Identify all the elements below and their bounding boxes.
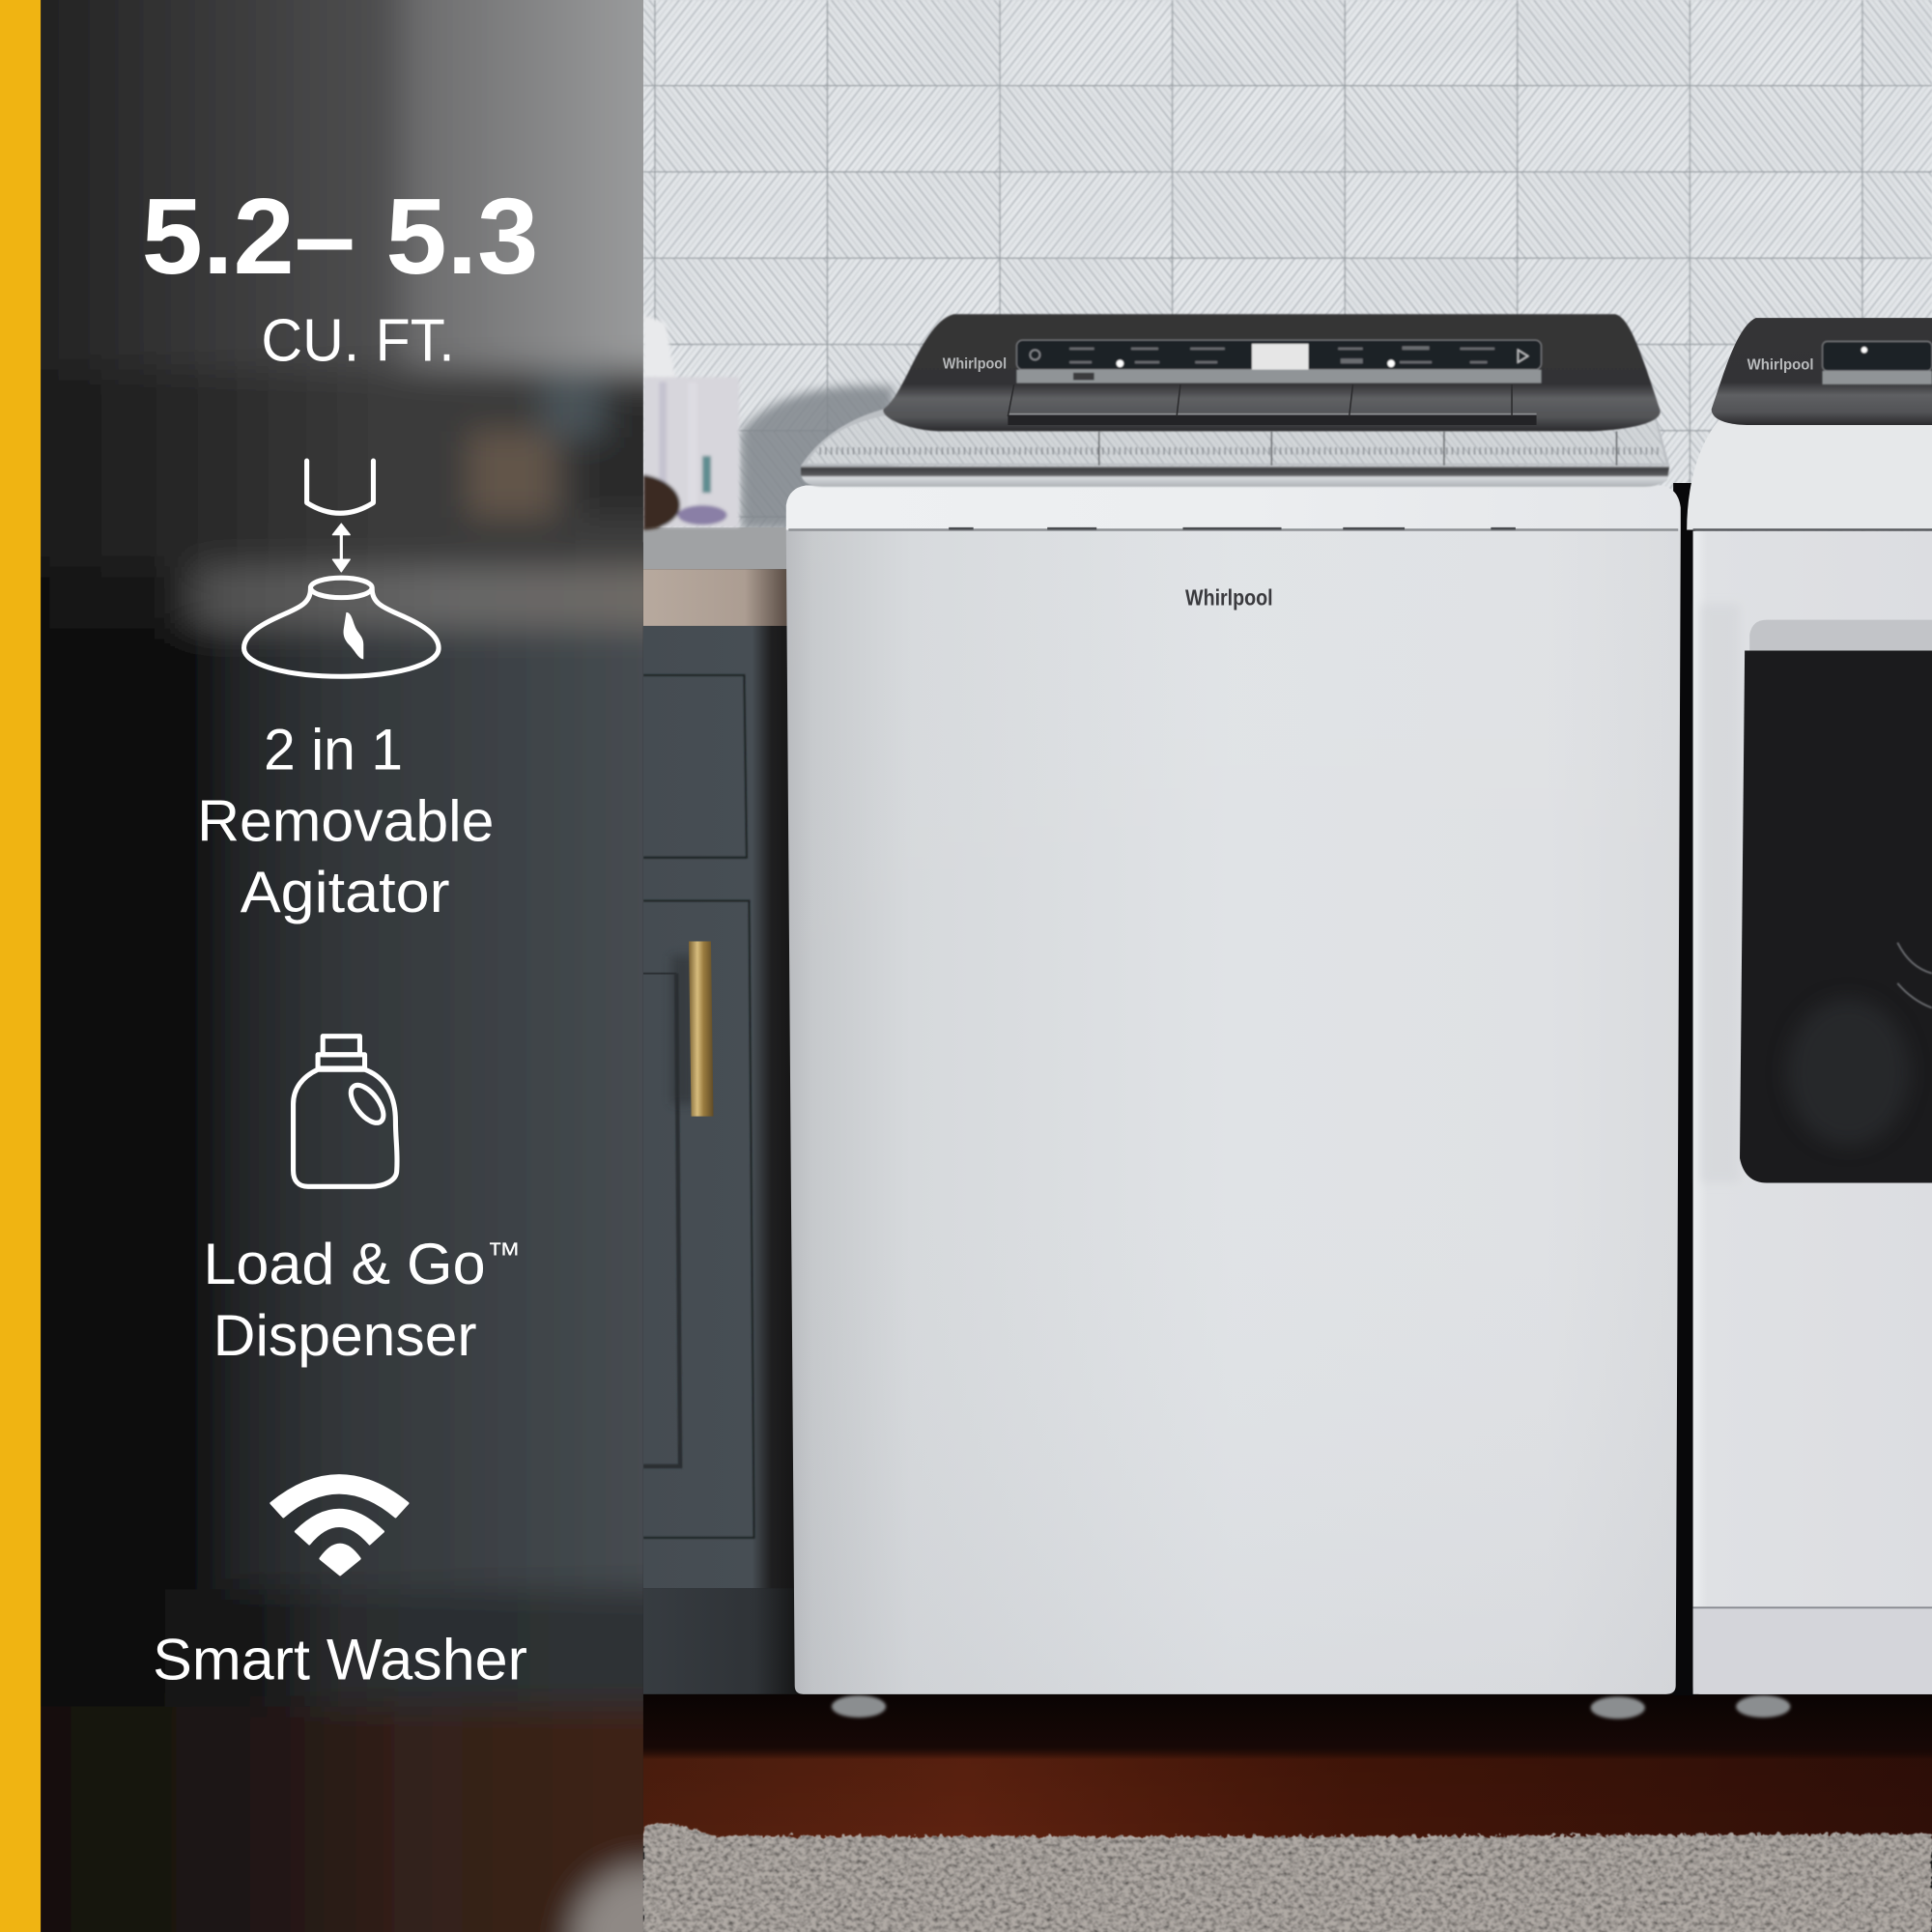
label: Load & Go Dispenser <box>203 1231 522 1368</box>
washer front logo: Whirlpool <box>1185 584 1273 610</box>
dryer <box>1687 318 1932 1694</box>
label: 2 in 1 Removable Agitator: 2 in 1 <box>264 717 403 782</box>
cabinet <box>643 626 804 1707</box>
icon: wifi <box>271 1475 408 1575</box>
icon: detergent bottle <box>294 1037 397 1186</box>
control panel display bar <box>1016 340 1542 384</box>
rug <box>643 1824 1932 1932</box>
console logo: Whirlpool <box>943 355 1007 372</box>
indicator lights <box>1117 359 1395 367</box>
dryer control panel <box>1822 341 1932 384</box>
label: Smart Washer: Smart Washer <box>153 1627 527 1692</box>
glass lid <box>801 407 1669 466</box>
dark gap between washer and dryer <box>1673 483 1695 1695</box>
power icon <box>1030 350 1040 359</box>
label: 2 in 1 Removable Agitator <box>197 717 494 924</box>
label: 2 in 1 Removable Agitator: Removable <box>197 788 494 854</box>
dryer top <box>1687 419 1932 529</box>
dryer door silver trim <box>1749 620 1932 650</box>
washer <box>786 314 1681 1694</box>
background wall tiles <box>643 0 1932 542</box>
yellow accent bar <box>0 0 41 1932</box>
counter top <box>643 527 788 626</box>
dryer console <box>1712 318 1932 425</box>
floor <box>643 1694 1932 1842</box>
heading: capacity value: 5.2– 5.3 <box>142 177 538 297</box>
panel blurred scene <box>41 0 643 1932</box>
display screen <box>1252 344 1309 370</box>
label: Load & Go Dispenser: Load & Go <box>203 1231 486 1296</box>
heading: capacity unit: CU. FT. <box>261 307 455 375</box>
cabinet handle <box>671 941 714 1117</box>
washer top rim <box>786 486 1681 529</box>
wall shadow behind washer <box>741 386 894 529</box>
dryer door window <box>1740 650 1932 1182</box>
panel: blurred translucent sidebar <box>41 0 643 1932</box>
label: 2 in 1 Removable Agitator: Agitator <box>241 859 450 924</box>
icon: removable agitator <box>244 461 439 676</box>
washer body <box>786 529 1681 1694</box>
tissue box on counter <box>643 316 739 529</box>
console lower strip <box>1008 415 1537 425</box>
control console <box>883 314 1661 431</box>
label: Load & Go Dispenser: Dispenser <box>213 1302 477 1368</box>
washer feet <box>832 1695 1790 1719</box>
dryer console logo: Whirlpool <box>1747 357 1814 374</box>
start icon <box>1518 350 1528 362</box>
label: Load & Go Dispenser: ™ <box>487 1236 522 1273</box>
chrome lid trim <box>801 466 1669 487</box>
dryer cabinet front <box>1693 531 1932 1694</box>
